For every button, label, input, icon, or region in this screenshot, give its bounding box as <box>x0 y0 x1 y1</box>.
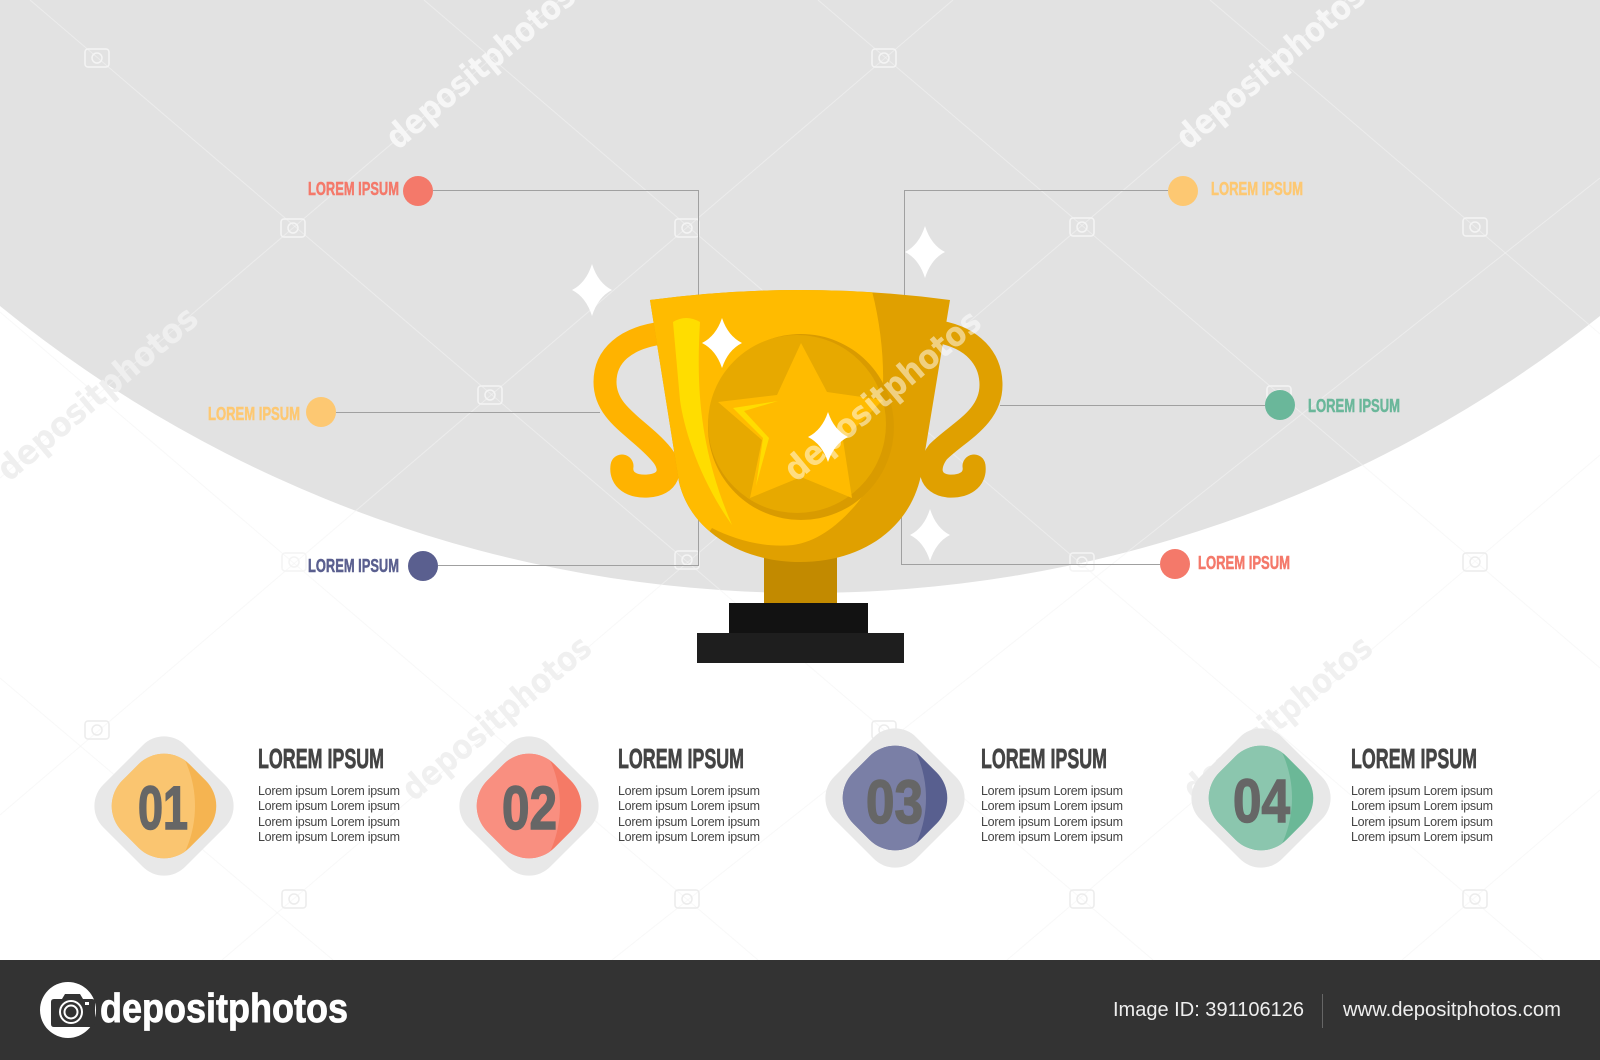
trophy base <box>697 603 904 663</box>
badge 02: 02 <box>502 774 557 842</box>
body 04: Lorem ipsum Lorem ipsum <box>1351 815 1493 829</box>
badge 04 <box>1192 728 1330 868</box>
trophy cup <box>640 270 950 562</box>
body 02: Lorem ipsum Lorem ipsum <box>618 815 760 829</box>
callout: middle right <box>1265 390 1400 420</box>
body 04: Lorem ipsum Lorem ipsum <box>1351 830 1493 844</box>
heading 04: LOREM IPSUM <box>1351 743 1477 774</box>
connector lines <box>336 190 1265 566</box>
item 04 <box>1192 728 1492 868</box>
watermark text on background: depositphotos <box>1175 627 1381 809</box>
callout: bottom left: LOREM IPSUM <box>308 556 399 576</box>
callout: top right: LOREM IPSUM <box>1211 179 1303 199</box>
trophy left handle <box>605 333 668 486</box>
body 03: Lorem ipsum Lorem ipsum <box>981 799 1123 813</box>
grey arc background <box>0 0 1600 593</box>
badge 04: 04 <box>1233 767 1290 835</box>
heading 02: LOREM IPSUM <box>618 743 744 774</box>
callout: bottom left <box>308 551 438 581</box>
trophy right handle <box>931 332 991 486</box>
icon: camera logo <box>40 982 96 1038</box>
body 04 <box>1351 784 1493 844</box>
body 01: Lorem ipsum Lorem ipsum <box>258 799 400 813</box>
callout: top left <box>308 176 433 206</box>
watermark on trophy: depositphotos <box>776 302 989 490</box>
trophy medallion <box>708 334 894 520</box>
callout: middle left: LOREM IPSUM <box>208 404 300 424</box>
item 01 <box>94 736 400 876</box>
body 02: Lorem ipsum Lorem ipsum <box>618 830 760 844</box>
icon: sparkle lower right <box>910 509 950 561</box>
body 02: Lorem ipsum Lorem ipsum <box>618 799 760 813</box>
icon: sparkle on star <box>808 412 848 462</box>
body 01: Lorem ipsum Lorem ipsum <box>258 815 400 829</box>
callout: top right <box>1168 176 1303 206</box>
body 02: Lorem ipsum Lorem ipsum <box>618 784 760 798</box>
icon: sparkle upper left <box>572 264 612 316</box>
footer band <box>0 960 1600 1060</box>
heading 03: LOREM IPSUM <box>981 743 1107 774</box>
badge 03: 03 <box>866 768 923 836</box>
body 02 <box>618 784 760 844</box>
body 03: Lorem ipsum Lorem ipsum <box>981 784 1123 798</box>
callout: middle left <box>208 397 336 427</box>
footer separator <box>1322 994 1323 1028</box>
callout: bottom right: LOREM IPSUM <box>1198 553 1290 573</box>
icon: trophy <box>605 270 991 663</box>
icon: sparkle upper right <box>905 226 945 278</box>
trophy star <box>718 343 883 498</box>
watermark text on background <box>0 0 1381 809</box>
body 01: Lorem ipsum Lorem ipsum <box>258 784 400 798</box>
item 02 <box>460 736 760 876</box>
icon: sparkle on cup <box>702 318 742 368</box>
callout: top left: LOREM IPSUM <box>308 179 399 199</box>
badge 01 <box>94 736 234 876</box>
callout: bottom right <box>1160 549 1290 579</box>
image id: Image ID: 391106126 <box>1113 999 1304 1021</box>
body 03: Lorem ipsum Lorem ipsum <box>981 815 1123 829</box>
callout: middle right: LOREM IPSUM <box>1308 396 1400 416</box>
logo wordmark: depositphotos <box>100 985 348 1031</box>
body 01 <box>258 784 400 844</box>
heading 01: LOREM IPSUM <box>258 743 384 774</box>
body 04: Lorem ipsum Lorem ipsum <box>1351 799 1493 813</box>
body 01: Lorem ipsum Lorem ipsum <box>258 830 400 844</box>
badge 03 <box>826 728 964 868</box>
item 03 <box>826 728 1122 868</box>
badge 01: 01 <box>138 774 188 842</box>
body 04: Lorem ipsum Lorem ipsum <box>1351 784 1493 798</box>
trophy stem <box>764 550 837 603</box>
body 03: Lorem ipsum Lorem ipsum <box>981 830 1123 844</box>
watermark text on background: depositphotos <box>394 627 600 809</box>
badge 02 <box>460 736 598 876</box>
body 03 <box>981 784 1123 844</box>
watermark camera icons <box>85 49 1487 908</box>
website url: www.depositphotos.com <box>1342 999 1561 1021</box>
